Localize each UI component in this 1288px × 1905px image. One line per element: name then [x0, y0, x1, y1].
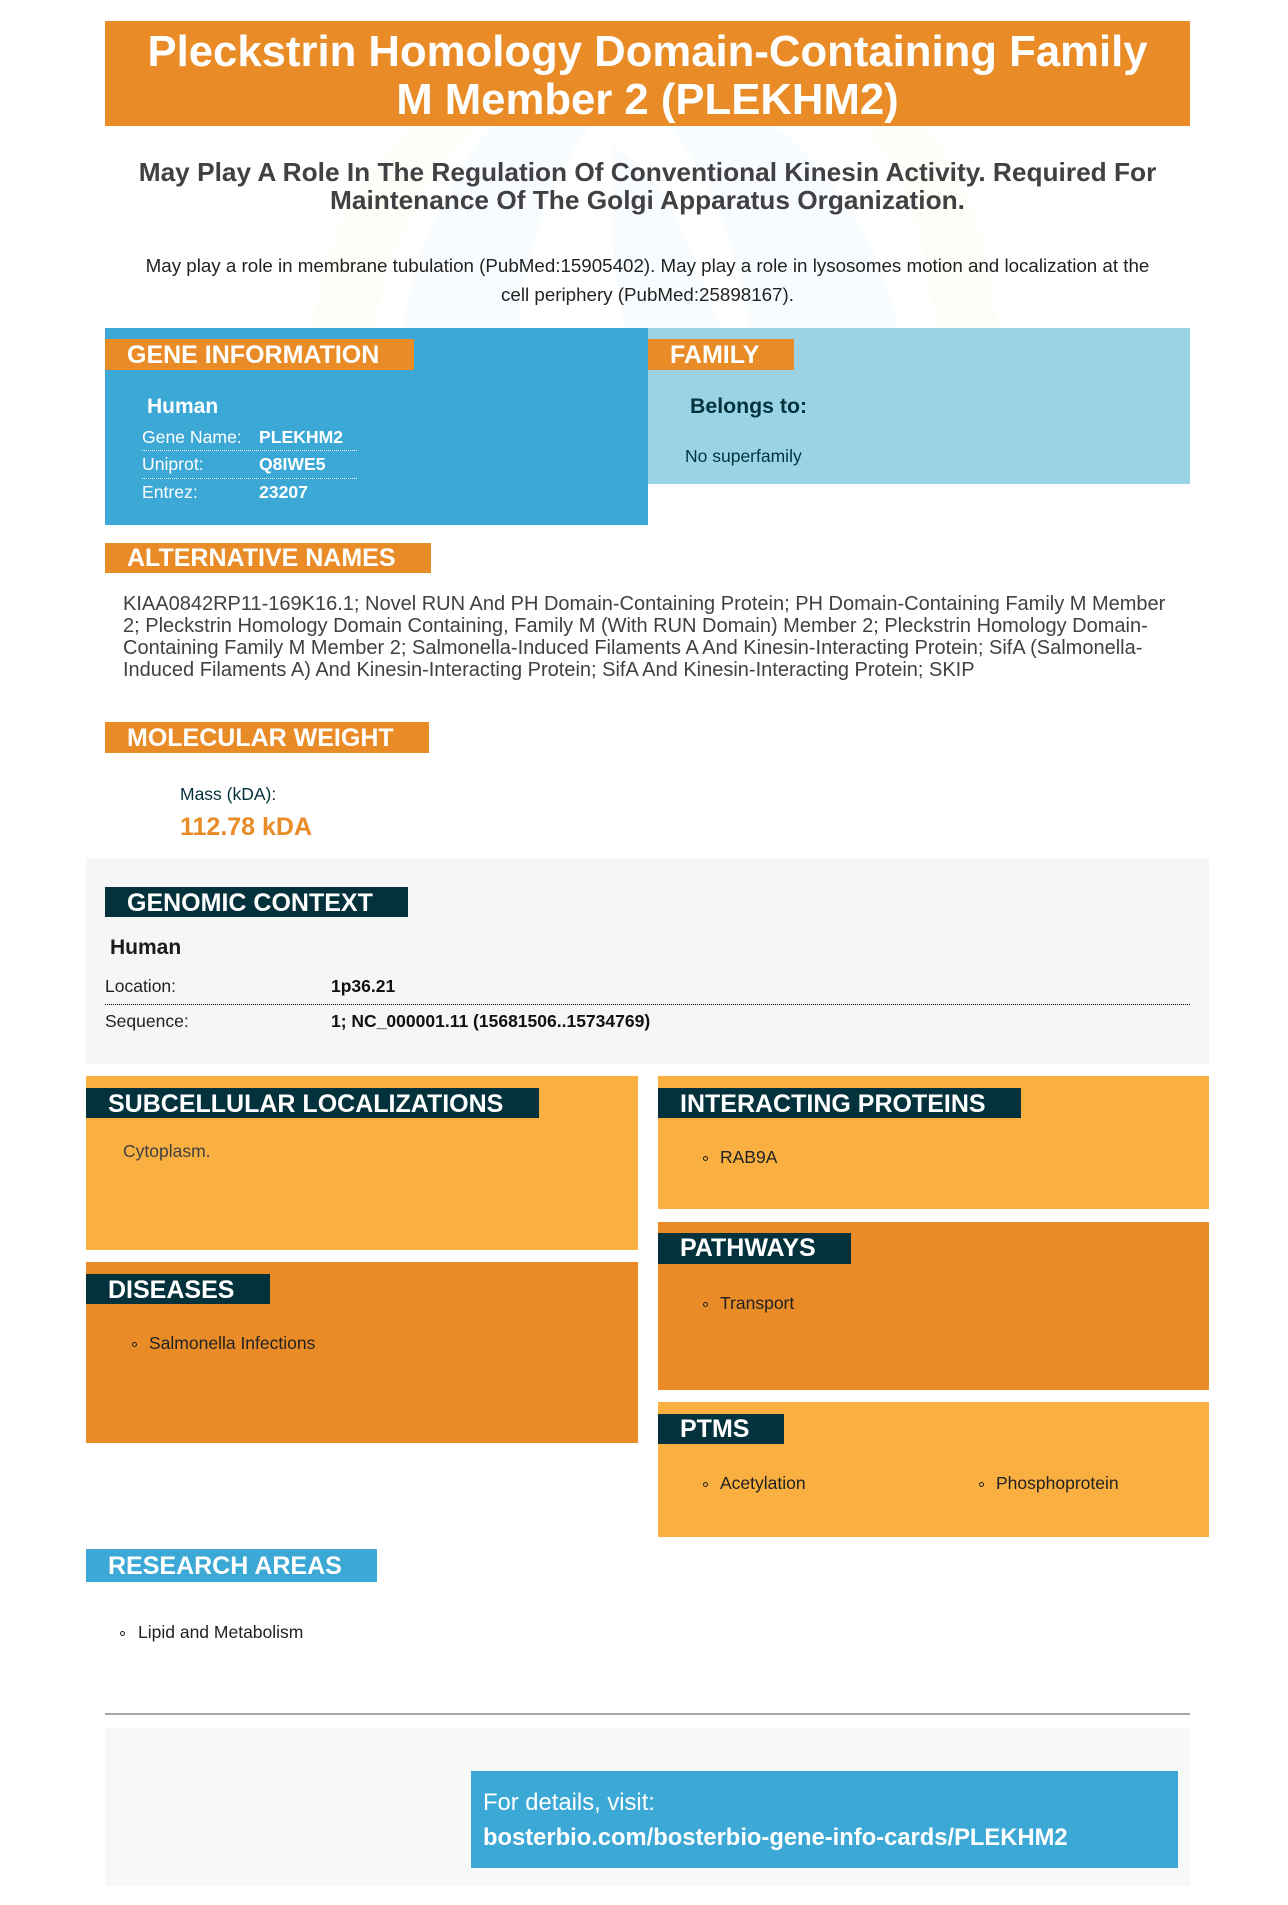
heading: INTERACTING PROTEINS	[680, 1090, 986, 1118]
list item: Salmonella Infections	[149, 1333, 315, 1353]
gene table: 23207	[259, 482, 308, 502]
callout label: For details, visit:	[483, 1789, 655, 1816]
list item: RAB9A	[720, 1147, 777, 1167]
location row	[105, 976, 395, 996]
description: cell periphery (PubMed:25898167).	[501, 284, 794, 305]
sequence row: 1; NC_000001.11 (15681506..15734769)	[331, 1011, 650, 1031]
panel: ptms	[658, 1402, 1209, 1537]
belongs to label: Belongs to:	[690, 394, 807, 418]
heading: family	[648, 339, 794, 370]
heading	[86, 1274, 270, 1304]
heading: genomic context: GENOMIC CONTEXT	[127, 889, 373, 917]
alternative names text: KIAA0842RP11-169K16.1; Novel RUN And PH Domain-Containing Protein; PH Domain-Containing Family M Member	[123, 593, 1165, 615]
callout url: bosterbio.com/bosterbio-gene-info-cards/PLEKHM2	[483, 1824, 1068, 1851]
family value: No superfamily	[685, 446, 802, 466]
heading: molecular weight: MOLECULAR WEIGHT	[127, 724, 394, 752]
subtitle: Maintenance Of The Golgi Apparatus Organization.	[330, 185, 965, 215]
panel: family	[648, 328, 1190, 484]
watermark: faint logo arcs	[300, 126, 1000, 328]
heading: gene information: GENE INFORMATION	[127, 341, 379, 369]
heading: family: FAMILY	[670, 341, 759, 369]
subtitle: May Play A Role In The Regulation Of Conventional Kinesin Activity. Required For	[139, 157, 1156, 187]
mass value: 112.78 kDA	[180, 813, 312, 841]
panel: interacting proteins	[658, 1076, 1209, 1209]
heading	[658, 1414, 784, 1444]
alternative names text: 2; Pleckstrin Homology Domain Containing, Family M (With RUN Domain) Member 2; Pleckstrin Homology Domain-	[123, 615, 1148, 637]
panel: subcellular localizations	[86, 1076, 638, 1250]
alternative names text: Containing Family M Member 2; Salmonella-Induced Filaments A And Kinesin-Interacting Protein; SifA (Salmonella-	[123, 637, 1142, 659]
location row: 1p36.21	[331, 976, 395, 996]
panel: diseases	[86, 1262, 638, 1443]
research area item: Lipid and Metabolism	[138, 1622, 303, 1642]
subtitle	[139, 157, 1156, 215]
gene table: PLEKHM2	[259, 427, 343, 447]
species label: Human	[147, 395, 218, 418]
panel: gene information	[105, 328, 648, 525]
species label: Human	[110, 936, 181, 959]
heading: PTMS	[680, 1415, 749, 1443]
location row: Location:	[105, 976, 176, 996]
title	[105, 21, 1190, 126]
gene table: Q8IWE5	[259, 454, 325, 474]
description: May play a role in membrane tubulation (PubMed:15905402). May play a role in lysosomes motion and localization at the	[146, 255, 1149, 276]
panel: pathways	[658, 1222, 1209, 1390]
sequence row	[105, 1011, 650, 1031]
sequence row: Sequence:	[105, 1011, 189, 1031]
heading: PATHWAYS	[680, 1234, 816, 1262]
text: Cytoplasm.	[123, 1141, 211, 1161]
list item: phosphoprotein: Phosphoprotein	[996, 1473, 1119, 1493]
alternative names text: Induced Filaments A) And Kinesin-Interacting Protein; SifA And Kinesin-Interacting Protein; SKIP	[123, 659, 975, 681]
list item: acetylation: Acetylation	[720, 1473, 806, 1493]
mass label: Mass (kDA):	[180, 784, 276, 804]
description	[146, 255, 1149, 305]
title: M Member 2 (PLEKHM2)	[396, 75, 899, 124]
callout: details link	[471, 1771, 1178, 1868]
gene table: Gene Name:	[142, 427, 242, 447]
heading	[658, 1233, 851, 1264]
gene table: Uniprot:	[142, 454, 204, 474]
title: Pleckstrin Homology Domain-Containing Family	[147, 27, 1148, 76]
heading: research areas	[86, 1549, 377, 1582]
heading: DISEASES	[108, 1276, 234, 1304]
gene table	[142, 427, 357, 502]
list item: Transport	[720, 1293, 794, 1313]
gene table: Entrez:	[142, 482, 198, 502]
heading: SUBCELLULAR LOCALIZATIONS	[108, 1090, 503, 1118]
panel: footer	[105, 1728, 1190, 1886]
heading: research areas: RESEARCH AREAS	[108, 1552, 342, 1580]
panel: genomic context	[86, 858, 1209, 1064]
alternative names text	[123, 593, 1165, 681]
heading: alternative names: ALTERNATIVE NAMES	[127, 544, 396, 572]
